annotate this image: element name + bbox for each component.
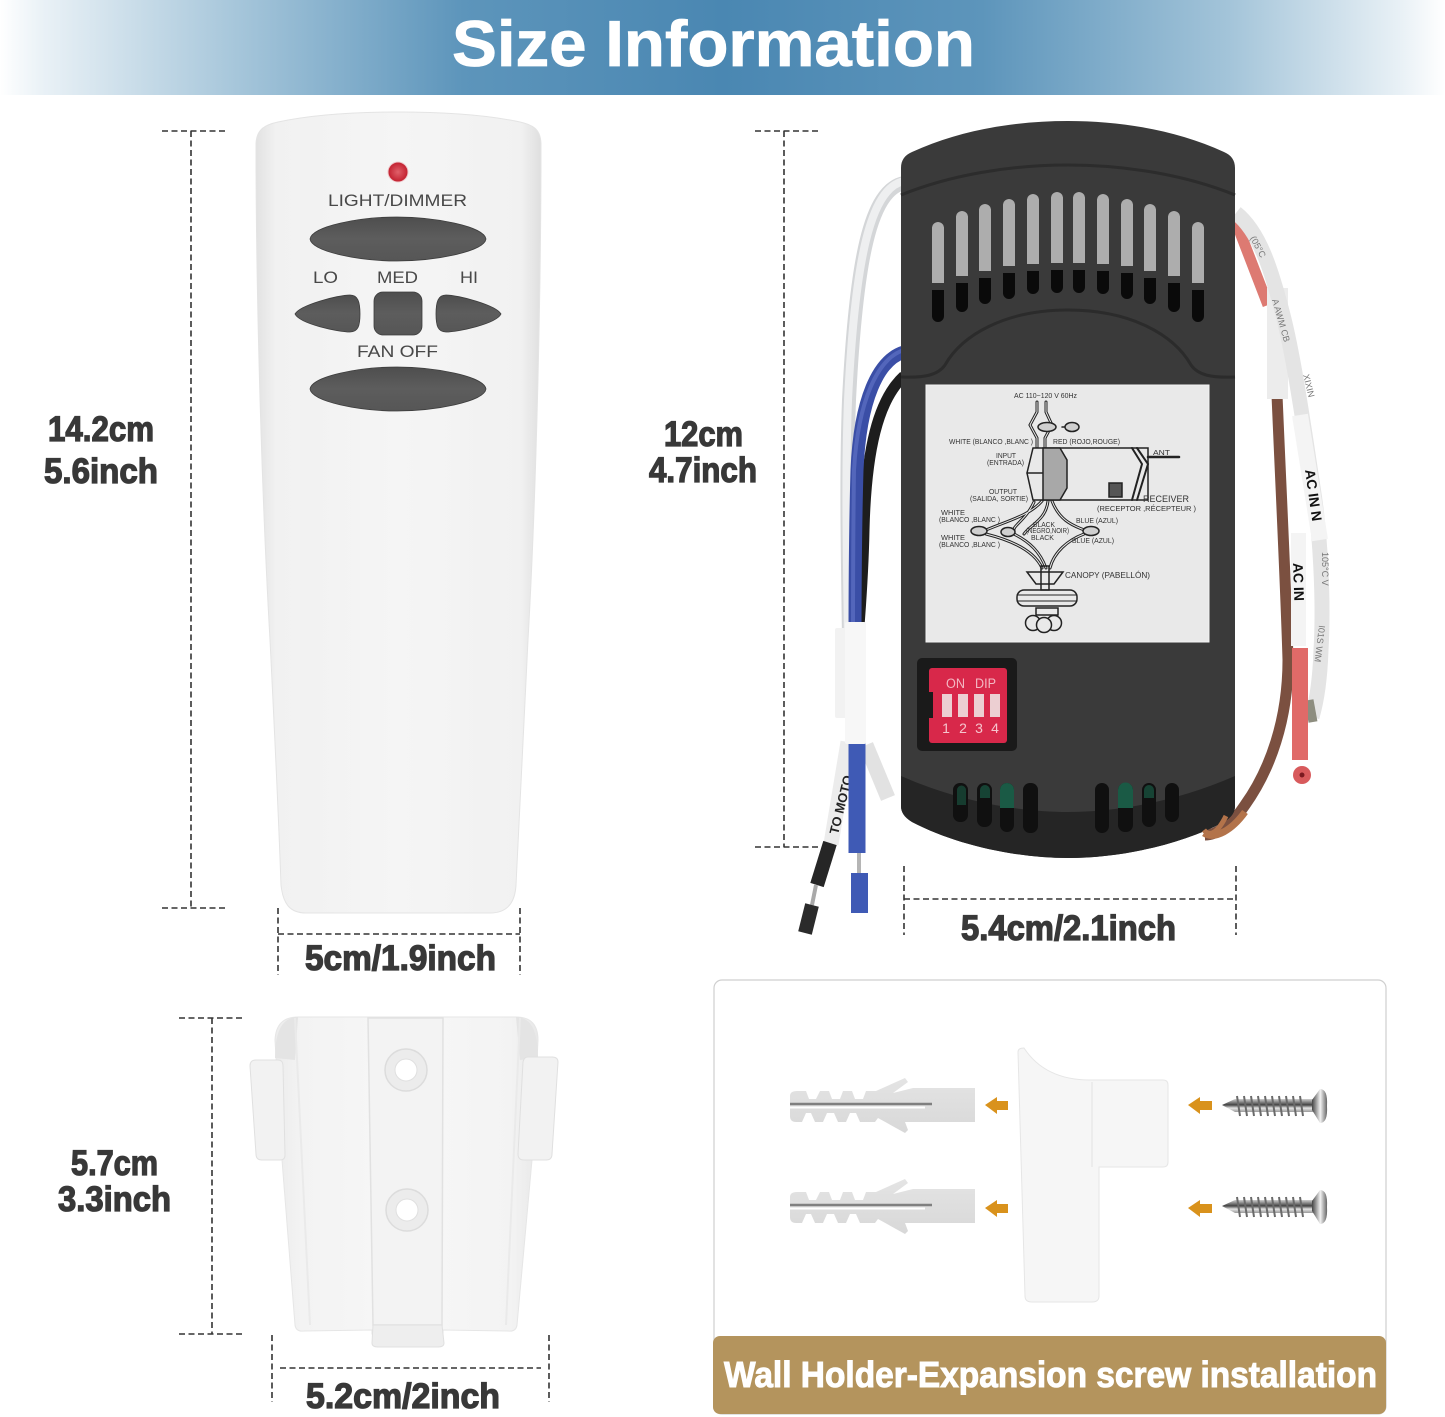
remote width dimension: 5cm/1.9inch	[305, 939, 496, 978]
wiring label: AC 110~120 V 60Hz	[1014, 391, 1077, 400]
wiring label: WHITE	[941, 508, 965, 517]
wiring label: WHITE (BLANCO ,BLANC )	[949, 437, 1033, 446]
title banner	[0, 0, 1445, 95]
receiver width dimension: 5.4cm/2.1inch	[961, 909, 1176, 948]
receiver wires right: I01S WM	[1313, 625, 1327, 663]
red tail	[1291, 533, 1306, 646]
receiver wires left: TO MOTO	[826, 774, 855, 836]
blue wire	[855, 352, 904, 640]
wire sleeves	[835, 628, 859, 718]
screw top	[1222, 1089, 1327, 1123]
wiring label: INPUT	[996, 451, 1016, 460]
wiring label: BLUE (AZUL)	[1072, 536, 1114, 545]
brown wire	[1205, 395, 1288, 835]
brown sleeve	[1267, 288, 1288, 399]
arch ridge	[901, 310, 1235, 377]
wall holder front view	[250, 1017, 558, 1347]
DIP switch	[917, 658, 1017, 751]
DIP switch: 1	[942, 720, 950, 736]
wiring label: WHITE	[941, 533, 965, 542]
holder width dimension	[272, 1335, 549, 1416]
bottom vent slots	[953, 782, 1179, 833]
wiring label: BLUE (AZUL)	[1076, 516, 1118, 525]
screw holes	[385, 1049, 427, 1091]
remote control: FAN OFF	[357, 342, 438, 361]
remote height dimension: 14.2cm	[48, 410, 154, 449]
panel: installation	[713, 980, 1386, 1414]
receiver wires right: AC IN	[1290, 563, 1307, 601]
receiver height dimension: 4.7inch	[649, 451, 757, 490]
remote control: MED	[377, 268, 418, 287]
button labels: LIGHT/DIMMER	[328, 191, 467, 210]
vent slots	[932, 192, 1204, 322]
center channel	[368, 1018, 443, 1325]
wiring label: OUTPUT	[989, 487, 1017, 496]
white stub	[866, 745, 888, 798]
DIP switch: DIP	[975, 676, 996, 691]
remote width dimension	[278, 908, 520, 978]
remote height dimension	[44, 131, 228, 908]
wiring label	[926, 385, 1209, 642]
blue tail	[848, 740, 866, 853]
receiver copper tail	[1204, 816, 1226, 834]
remote control: HI	[460, 268, 478, 287]
bottom tab	[372, 1325, 444, 1347]
arrows	[985, 1097, 1212, 1217]
wiring label: ANT	[1153, 448, 1171, 457]
top band ridge	[901, 165, 1235, 195]
wiring label: CANOPY (PABELLÓN)	[1065, 570, 1150, 580]
buttons	[295, 217, 501, 411]
wire paths, outer	[986, 402, 1084, 568]
to-motor wire	[831, 742, 848, 844]
receiver wires left	[805, 181, 904, 933]
wiring diagram	[971, 402, 1179, 632]
receiver body	[901, 121, 1235, 858]
wiring label: (ENTRADA)	[987, 458, 1024, 467]
holder height dimension: 5.7cm	[71, 1144, 158, 1183]
holder width dimension: 5.2cm/2inch	[306, 1377, 500, 1416]
DIP switch: 2	[959, 720, 967, 736]
receiver height dimension: 12cm	[664, 415, 743, 454]
receiver wires right: (05°C	[1248, 234, 1268, 260]
wiring label: RED (ROJO,ROUGE)	[1053, 437, 1120, 446]
DIP switch: 3	[975, 720, 983, 736]
holder height dimension: 3.3inch	[58, 1180, 171, 1219]
wiring label: (BLANCO ,BLANC )	[939, 515, 1000, 524]
black wire	[858, 376, 904, 640]
wiring label: BLACK	[1033, 520, 1055, 529]
DIP switch: 4	[991, 720, 999, 736]
title: Size Information	[452, 7, 975, 80]
wiring label: BLACK	[1031, 533, 1054, 542]
receiver wires right: A AWM CB	[1270, 298, 1292, 343]
lower dark band	[901, 776, 1235, 858]
wall holder side view	[1018, 1048, 1168, 1302]
remote height dimension: 5.6inch	[44, 452, 158, 491]
side clips	[250, 1060, 285, 1160]
wiring label: RECEIVER	[1143, 494, 1189, 504]
wall anchor top	[790, 1078, 975, 1133]
DIP switch: ON	[946, 676, 965, 691]
wiring label: (SALIDA, SORTIE)	[970, 494, 1028, 503]
red wire	[1236, 222, 1268, 305]
wiring label: (RECEPTOR ,RÉCEPTEUR )	[1097, 504, 1196, 513]
screw bottom	[1222, 1190, 1327, 1224]
shaded corners	[275, 1017, 538, 1060]
body	[275, 1017, 538, 1334]
wall anchor bottom	[790, 1179, 975, 1234]
remote control	[256, 112, 541, 913]
indicator light	[388, 162, 408, 182]
wire paths, inner	[986, 402, 1084, 568]
receiver width dimension	[904, 866, 1236, 948]
receiver wires right: 105°C V	[1320, 552, 1330, 586]
white wire	[847, 183, 904, 640]
receiver wires right	[1204, 213, 1330, 835]
wiring label: (NEGRO,NOIR)	[1026, 526, 1069, 535]
white wire with print	[1236, 213, 1322, 717]
receiver wires right: AC IN N	[1302, 468, 1325, 522]
caption bar	[713, 1336, 1386, 1414]
receiver wires right: XIXIN	[1301, 373, 1316, 398]
remote control: LO	[313, 268, 338, 287]
holder height dimension	[58, 1018, 245, 1334]
receiver height dimension	[649, 131, 821, 847]
wiring label: (BLANCO ,BLANC )	[939, 540, 1000, 549]
caption text: Wall Holder-Expansion screw installation	[724, 1354, 1377, 1395]
